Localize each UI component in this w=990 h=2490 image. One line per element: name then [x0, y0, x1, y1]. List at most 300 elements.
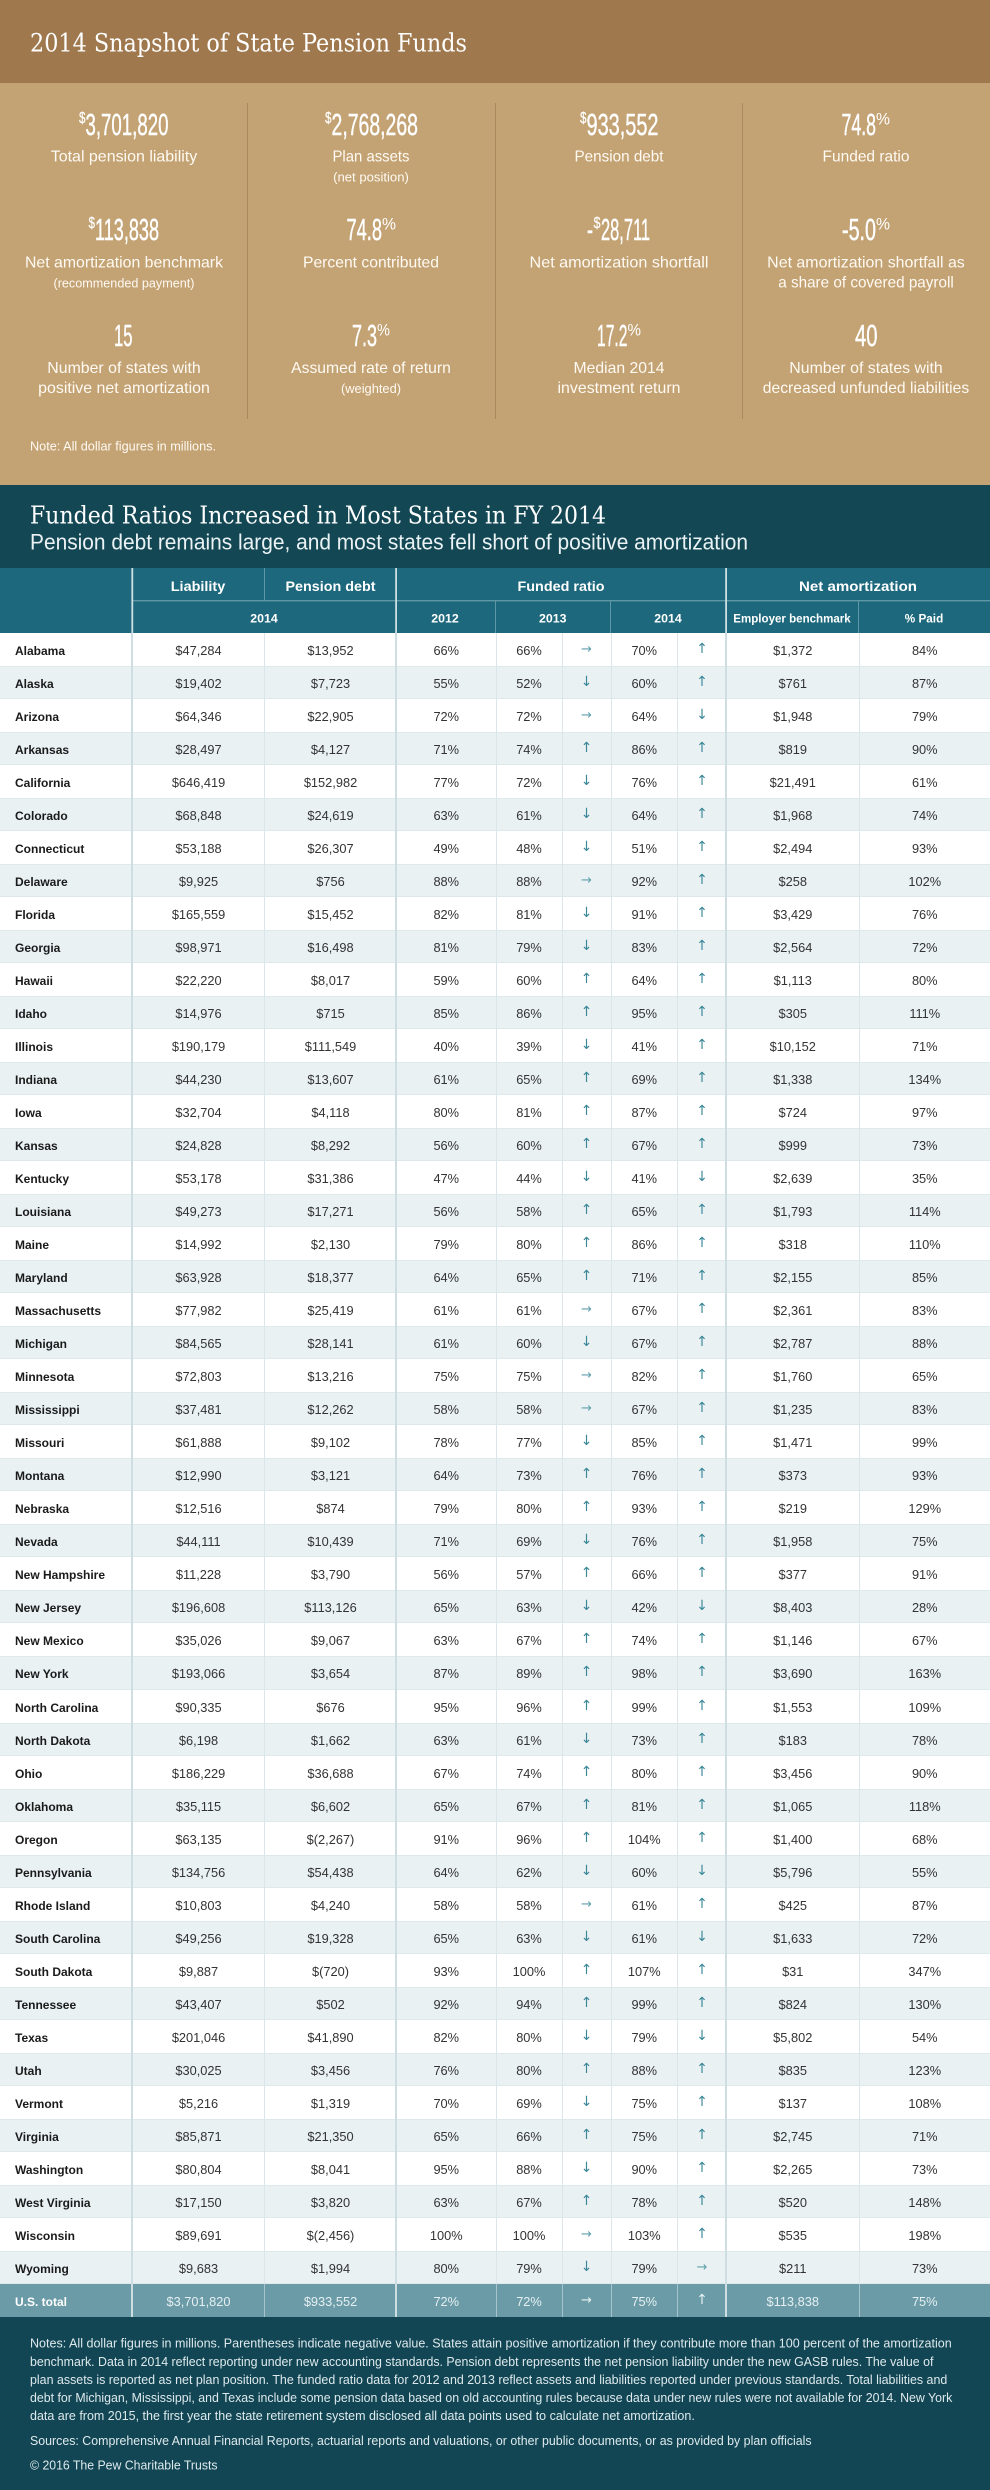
row: Alabama: 66% [433, 643, 459, 658]
row: Idaho: $715 [316, 1006, 345, 1021]
row: Pennsylvania: 64% [433, 1865, 459, 1880]
notes: Notes: All dollar figures in millions. Parentheses indicate negative value. States attain positive amortization if they contribute more than 100 percent of the amortization [30, 2337, 952, 2351]
row: Louisiana: 58% [516, 1204, 542, 1219]
row: New Jersey: $8,403 [773, 1600, 812, 1615]
row: Alaska [0, 666, 990, 699]
row: Arkansas: $4,127 [311, 742, 350, 757]
row: South Dakota: ↑ [696, 1962, 708, 1978]
row: Illinois: 39% [516, 1039, 542, 1054]
row: Michigan: 88% [912, 1336, 938, 1351]
row: Colorado: 63% [433, 808, 459, 823]
row: Arkansas: 71% [433, 742, 459, 757]
row: Missouri: 85% [631, 1435, 657, 1450]
row: Maine: Maine [15, 1238, 49, 1252]
row: Virginia: $85,871 [175, 2129, 222, 2144]
row: Nevada: 75% [912, 1534, 938, 1549]
row: Missouri: 99% [912, 1435, 938, 1450]
row: Washington: 88% [516, 2162, 542, 2177]
row: Indiana: $1,338 [773, 1072, 812, 1087]
row: Texas: 79% [631, 2030, 657, 2045]
row: Maine: 79% [433, 1237, 459, 1252]
row: Massachusetts: $77,982 [175, 1303, 222, 1318]
row: Alabama: Alabama [15, 644, 65, 658]
row: Hawaii: 59% [433, 973, 459, 988]
stat: assumed rate of return: % [377, 320, 390, 340]
row: Iowa: ↑ [696, 1103, 708, 1119]
row: U.S. total: $113,838 [767, 2294, 819, 2309]
row: Ohio: ↑ [696, 1764, 708, 1780]
row: Minnesota: 65% [912, 1369, 938, 1384]
title: snapshot: 2014 Snapshot of State Pension Funds [30, 28, 467, 58]
stat: net amortization benchmark: 113,838 [95, 212, 159, 247]
row: West Virginia: West Virginia [15, 2196, 91, 2210]
row: Oregon: 96% [516, 1832, 542, 1847]
row: Rhode Island: 58% [516, 1898, 542, 1913]
row: Arkansas: 74% [516, 742, 542, 757]
row: Mississippi: Mississippi [15, 1403, 80, 1417]
row: Utah [0, 2053, 990, 2086]
stat: net amortization benchmark: $ [88, 215, 95, 232]
row: Florida: $165,559 [172, 907, 225, 922]
row: Oklahoma: $6,602 [311, 1799, 350, 1814]
row: Tennessee: 94% [516, 1997, 542, 2012]
row: Texas: ↓ [696, 2028, 708, 2044]
row: Wyoming: 79% [516, 2261, 542, 2276]
row: Maine: ↑ [581, 1235, 592, 1251]
copyright: © 2016 The Pew Charitable Trusts [30, 2458, 218, 2472]
stat: funded ratio [822, 107, 910, 166]
row: Utah: ↑ [581, 2061, 592, 2077]
stat: net amortization shortfall: 28,711 [601, 212, 650, 247]
row: Montana: $373 [779, 1468, 807, 1483]
row: Delaware: $756 [316, 874, 345, 889]
row: Illinois: ↑ [696, 1037, 708, 1053]
row: Nevada [0, 1524, 990, 1557]
row: Ohio: Ohio [15, 1767, 42, 1781]
row: South Carolina: $1,633 [773, 1931, 812, 1946]
row: Wisconsin: ↑ [696, 2226, 708, 2242]
row: Iowa: 80% [433, 1105, 459, 1120]
row: Utah: $30,025 [175, 2063, 222, 2078]
row: New Mexico: ↑ [581, 1631, 592, 1647]
row: Wyoming: → [697, 2260, 707, 2275]
row: Iowa [0, 1095, 990, 1128]
row: Alabama: $1,372 [773, 643, 812, 658]
stat: assumed rate of return: 7.3 [352, 318, 377, 353]
row: Idaho: 86% [516, 1006, 542, 1021]
row: Tennessee: ↑ [696, 1995, 708, 2011]
row: Maryland: $18,377 [307, 1270, 354, 1285]
row: South Carolina: 65% [433, 1931, 459, 1946]
row: Washington: ↓ [581, 2160, 592, 2176]
row: Virginia: 71% [912, 2129, 938, 2144]
row: Texas: Texas [15, 2031, 48, 2045]
row: Maine: $14,992 [175, 1237, 222, 1252]
row: Maine: $2,130 [311, 1237, 350, 1252]
row: North Carolina: 96% [516, 1700, 542, 1714]
row: New Mexico: 67% [516, 1633, 542, 1648]
row: Nebraska [0, 1491, 990, 1524]
row: Wisconsin: → [581, 2227, 592, 2242]
row: Oregon: 91% [433, 1832, 459, 1847]
stat: states with decreased unfunded liabilities: 40 [855, 318, 878, 353]
stat: plan assets [325, 107, 418, 184]
row: Florida: Florida [15, 908, 55, 922]
row: Maryland: Maryland [15, 1271, 68, 1285]
stat: states with positive net amortization: Number of states with [47, 360, 201, 377]
row: New York: $193,066 [172, 1666, 225, 1681]
stat: shortfall share of payroll: -5.0 [842, 212, 876, 247]
row: Massachusetts: 61% [433, 1303, 459, 1318]
row: Missouri: ↓ [581, 1433, 592, 1449]
row: Delaware: 88% [516, 874, 542, 889]
row: New Hampshire: $377 [779, 1567, 807, 1582]
row: Maine [0, 1227, 990, 1260]
row: Hawaii: 80% [912, 973, 938, 988]
row: Massachusetts: 83% [912, 1303, 938, 1318]
row: Indiana [0, 1062, 990, 1095]
column headers: Net amortization [799, 578, 917, 594]
row: Nevada: $10,439 [307, 1534, 354, 1549]
row: Oklahoma: ↑ [581, 1797, 592, 1813]
stat: plan assets: Plan assets [332, 149, 410, 166]
row: Missouri: Missouri [15, 1436, 64, 1450]
row: U.S. total: U.S. total [15, 2295, 67, 2309]
row: Connecticut: Connecticut [15, 842, 84, 856]
row: Georgia: 79% [516, 940, 542, 955]
row: Iowa: Iowa [15, 1106, 42, 1120]
row: Tennessee: Tennessee [15, 1998, 76, 2012]
row: West Virginia: 148% [908, 2195, 941, 2210]
row: Georgia: 72% [912, 940, 938, 955]
stat: states with positive net amortization [38, 318, 210, 397]
row: North Dakota: 61% [516, 1733, 542, 1748]
row: Washington: Washington [15, 2163, 83, 2177]
row: Connecticut: ↓ [581, 839, 592, 855]
row: Kentucky [0, 1161, 990, 1194]
row: Massachusetts: $2,361 [773, 1303, 812, 1318]
row: Missouri [0, 1425, 990, 1458]
row: Nebraska: $12,516 [175, 1501, 222, 1516]
row: Arizona [0, 699, 990, 732]
row: Hawaii: $8,017 [311, 973, 350, 988]
row: Nevada: 69% [516, 1534, 542, 1549]
stat: shortfall share of payroll: a share of covered payroll [778, 274, 954, 291]
row: Arkansas: $819 [779, 742, 807, 757]
row: New Jersey: New Jersey [15, 1601, 81, 1615]
row: North Dakota: $6,198 [179, 1733, 218, 1748]
footer: notes and sources [0, 2317, 990, 2490]
row: Arizona: $1,948 [773, 709, 812, 724]
row: Vermont: $1,319 [311, 2096, 350, 2111]
row: South Carolina: $49,256 [175, 1931, 222, 1946]
row: Nebraska: ↑ [581, 1499, 592, 1515]
row: Ohio: 67% [433, 1766, 459, 1781]
row: North Carolina: $1,553 [773, 1700, 812, 1714]
row: Arizona: ↓ [696, 707, 708, 723]
row: Missouri: 77% [516, 1435, 542, 1450]
row: Kansas: 56% [433, 1138, 459, 1153]
stat: percent contributed: Percent contributed [303, 254, 439, 271]
row: Indiana: 65% [516, 1072, 542, 1087]
row: Delaware: $258 [779, 874, 807, 889]
row: West Virginia: 63% [433, 2195, 459, 2210]
row: Oklahoma: 65% [433, 1799, 459, 1814]
row: Connecticut: ↑ [696, 839, 708, 855]
row: Rhode Island: → [581, 1897, 592, 1912]
row: New York: New York [15, 1667, 69, 1681]
row: Oklahoma: $1,065 [773, 1799, 812, 1814]
row: Oklahoma: Oklahoma [15, 1800, 73, 1814]
row: Pennsylvania: Pennsylvania [15, 1866, 92, 1880]
row: New Jersey: 65% [433, 1600, 459, 1615]
row: Alabama: 70% [631, 643, 657, 658]
row: Colorado: $68,848 [175, 808, 222, 823]
row: West Virginia: $3,820 [311, 2195, 350, 2210]
row: North Carolina [0, 1690, 990, 1723]
row: South Carolina: 63% [516, 1931, 542, 1946]
row: Idaho [0, 996, 990, 1029]
row: California: California [15, 776, 70, 790]
row: Alabama: $47,284 [175, 643, 222, 658]
row: Tennessee: 92% [433, 1997, 459, 2012]
row: Florida: ↓ [581, 905, 592, 921]
heading: funded ratios: Funded Ratios Increased in Most States in FY 2014 [30, 502, 606, 530]
row: Delaware: 102% [908, 874, 941, 889]
row: Alaska: 87% [912, 676, 938, 691]
row: Tennessee: 130% [908, 1997, 941, 2012]
row: Minnesota: 75% [516, 1369, 542, 1384]
row: Texas: ↓ [581, 2028, 592, 2044]
subheading: pension debt: Pension debt remains large, and most states fell short of positive amortization [30, 529, 748, 554]
row: Michigan: ↑ [696, 1334, 708, 1350]
row: Arkansas: $28,497 [175, 742, 222, 757]
row: Illinois: $111,549 [305, 1039, 356, 1054]
stat: total pension liability: Total pension liability [51, 149, 197, 166]
stat: net amortization shortfall: $ [594, 215, 601, 232]
row: Missouri: $61,888 [175, 1435, 222, 1450]
stat: total pension liability: 3,701,820 [86, 107, 168, 142]
row: Mississippi [0, 1392, 990, 1425]
row: Kansas: 73% [912, 1138, 938, 1153]
row: New Jersey: 28% [912, 1600, 938, 1615]
row: Kentucky: 44% [516, 1171, 542, 1186]
row: Nebraska: 80% [516, 1501, 542, 1516]
row: Arkansas [0, 732, 990, 765]
row: Delaware [0, 864, 990, 897]
stat: pension debt: 933,552 [586, 107, 658, 142]
row: Colorado: Colorado [15, 809, 68, 823]
row: Washington: $8,041 [311, 2162, 350, 2177]
row: Colorado: $24,619 [307, 808, 354, 823]
stat: net amortization shortfall: - [587, 212, 593, 247]
row: Maryland: ↑ [581, 1268, 592, 1284]
column headers: 2012 [431, 612, 459, 626]
row: North Carolina: 109% [908, 1700, 941, 1714]
row: New Jersey: ↓ [581, 1598, 592, 1614]
row: Louisiana: $1,793 [773, 1204, 812, 1219]
row: Ohio: 90% [912, 1766, 938, 1781]
row: Wyoming [0, 2251, 990, 2284]
row: Missouri: $9,102 [311, 1435, 350, 1450]
row: Wisconsin: $89,691 [175, 2228, 222, 2243]
row: Minnesota: → [581, 1368, 592, 1383]
row: Virginia: Virginia [15, 2130, 59, 2144]
row: Wisconsin: $535 [779, 2228, 807, 2243]
stat: net amortization shortfall: Net amortization shortfall [530, 254, 708, 271]
row: Louisiana [0, 1194, 990, 1227]
row: Connecticut: $53,188 [175, 841, 222, 856]
row: Tennessee: ↑ [581, 1995, 592, 2011]
row: Florida: 82% [433, 907, 459, 922]
row: Kentucky: 47% [433, 1171, 459, 1186]
row: Alaska: 60% [631, 676, 657, 691]
stat: funded ratio: % [876, 110, 890, 128]
row: South Carolina: 72% [912, 1931, 938, 1946]
row: Vermont: 70% [433, 2096, 459, 2111]
row: Maryland: 64% [433, 1270, 459, 1285]
row: Arkansas: 86% [631, 742, 657, 757]
row: New Hampshire [0, 1557, 990, 1590]
row: New Hampshire: New Hampshire [15, 1568, 105, 1582]
stat: plan assets: (net position) [333, 170, 409, 184]
row: Ohio: ↑ [581, 1764, 592, 1780]
stat: net amortization benchmark: Net amortization benchmark [25, 254, 223, 271]
row: Nebraska: $219 [779, 1501, 807, 1516]
row: Kentucky: Kentucky [15, 1172, 69, 1186]
row: Indiana: ↑ [696, 1070, 708, 1086]
row: California: $152,982 [304, 775, 357, 790]
row: Texas: $41,890 [307, 2030, 354, 2045]
row: Washington: $2,265 [773, 2162, 812, 2177]
row: Washington: $80,804 [175, 2162, 222, 2177]
row: Oklahoma: 81% [631, 1799, 657, 1814]
row: Louisiana: 56% [433, 1204, 459, 1219]
row: Delaware: → [581, 873, 592, 888]
row: Idaho: 85% [433, 1006, 459, 1021]
row: Vermont [0, 2086, 990, 2119]
row: Kansas: 60% [516, 1138, 542, 1153]
row: Nevada: $44,111 [176, 1534, 221, 1549]
row: Kansas: ↑ [696, 1136, 708, 1152]
row: Indiana: ↑ [581, 1070, 592, 1086]
row: South Dakota: ↑ [581, 1962, 592, 1978]
row: Montana: $12,990 [175, 1468, 222, 1483]
row: U.S. total: $3,701,820 [166, 2294, 231, 2309]
row: Georgia: $2,564 [773, 940, 812, 955]
row: Oklahoma: ↑ [696, 1797, 708, 1813]
row: Illinois: 41% [631, 1039, 657, 1054]
row: Iowa: $4,118 [311, 1105, 350, 1120]
column headers [171, 578, 943, 626]
row: Wyoming: $9,683 [179, 2261, 218, 2276]
row: Utah: 80% [516, 2063, 542, 2078]
row: California: $21,491 [770, 775, 816, 790]
row: Washington [0, 2152, 990, 2185]
row: South Carolina: South Carolina [15, 1932, 100, 1946]
note: dollar figures: Note: All dollar figures in millions. [30, 439, 216, 453]
row: Rhode Island: 87% [912, 1898, 938, 1913]
row: Oregon [0, 1822, 990, 1855]
row: Arizona: 72% [433, 709, 459, 724]
row: Wyoming: ↓ [581, 2259, 592, 2275]
row: Hawaii: ↑ [696, 971, 708, 987]
row: North Carolina: 99% [631, 1700, 657, 1714]
row: California: 76% [631, 775, 657, 790]
row: North Carolina: ↑ [696, 1698, 708, 1714]
stat: median investment return: 17.2 [597, 318, 628, 353]
row: Oregon: $63,135 [175, 1832, 222, 1847]
stat: median investment return: investment return [558, 380, 680, 397]
row: Massachusetts [0, 1293, 990, 1326]
row: Wisconsin: 100% [513, 2228, 545, 2243]
row: Vermont: 75% [631, 2096, 657, 2111]
row: California: 61% [912, 775, 938, 790]
row: New York: 87% [433, 1666, 459, 1681]
row: Oregon: $1,400 [773, 1832, 812, 1847]
row: New York: 89% [516, 1666, 542, 1681]
row: New Mexico: $9,067 [311, 1633, 350, 1648]
row: Indiana: $44,230 [175, 1072, 222, 1087]
row: Michigan: ↓ [581, 1334, 592, 1350]
row: Massachusetts: 61% [516, 1303, 542, 1318]
row: Indiana: 61% [433, 1072, 459, 1087]
row: Georgia: ↓ [581, 938, 592, 954]
row: Michigan: 61% [433, 1336, 459, 1351]
row: Maryland: 65% [516, 1270, 542, 1285]
row: Virginia: $21,350 [307, 2129, 354, 2144]
row: Louisiana: $17,271 [307, 1204, 354, 1219]
row: South Dakota: South Dakota [15, 1965, 92, 1979]
row: Nevada: Nevada [15, 1535, 58, 1549]
row: Oregon: ↑ [581, 1830, 592, 1846]
row: Vermont: 108% [908, 2096, 941, 2111]
row: Vermont: Vermont [15, 2097, 63, 2111]
row: Nebraska: 93% [631, 1501, 657, 1516]
row: Idaho: $14,976 [175, 1006, 222, 1021]
row: Maine: 80% [516, 1237, 542, 1252]
row: West Virginia: 67% [516, 2195, 542, 2210]
row: Ohio: $186,229 [172, 1766, 225, 1781]
row: North Carolina: $676 [316, 1700, 345, 1714]
row: Idaho: 95% [631, 1006, 657, 1021]
row: U.S. total: 72% [516, 2294, 542, 2309]
row: Kansas [0, 1128, 990, 1161]
row: New York: 98% [631, 1666, 657, 1681]
row: U.S. total: 75% [631, 2294, 657, 2309]
row: Tennessee: $502 [316, 1997, 345, 2012]
row: Louisiana: 114% [909, 1204, 941, 1219]
row: Virginia: ↑ [696, 2127, 708, 2143]
row: New Jersey: 63% [516, 1600, 542, 1615]
stat: plan assets: 2,768,268 [332, 107, 418, 142]
row: Arizona: Arizona [15, 710, 59, 724]
row: Pennsylvania: $134,756 [172, 1865, 225, 1880]
row: Maryland: $2,155 [773, 1270, 812, 1285]
row: Tennessee [0, 1987, 990, 2020]
row: West Virginia: ↑ [696, 2193, 708, 2209]
row: New Mexico [0, 1623, 990, 1656]
row: Arizona: 72% [516, 709, 542, 724]
row: Virginia: ↑ [581, 2127, 592, 2143]
row: Michigan: $28,141 [307, 1336, 354, 1351]
row: Pennsylvania: ↓ [696, 1863, 708, 1879]
row: Indiana: 134% [908, 1072, 941, 1087]
row: Maine: ↑ [696, 1235, 708, 1251]
row: North Dakota: 78% [912, 1733, 938, 1748]
row: Florida: 81% [516, 907, 542, 922]
row: Arkansas: ↑ [696, 740, 708, 756]
